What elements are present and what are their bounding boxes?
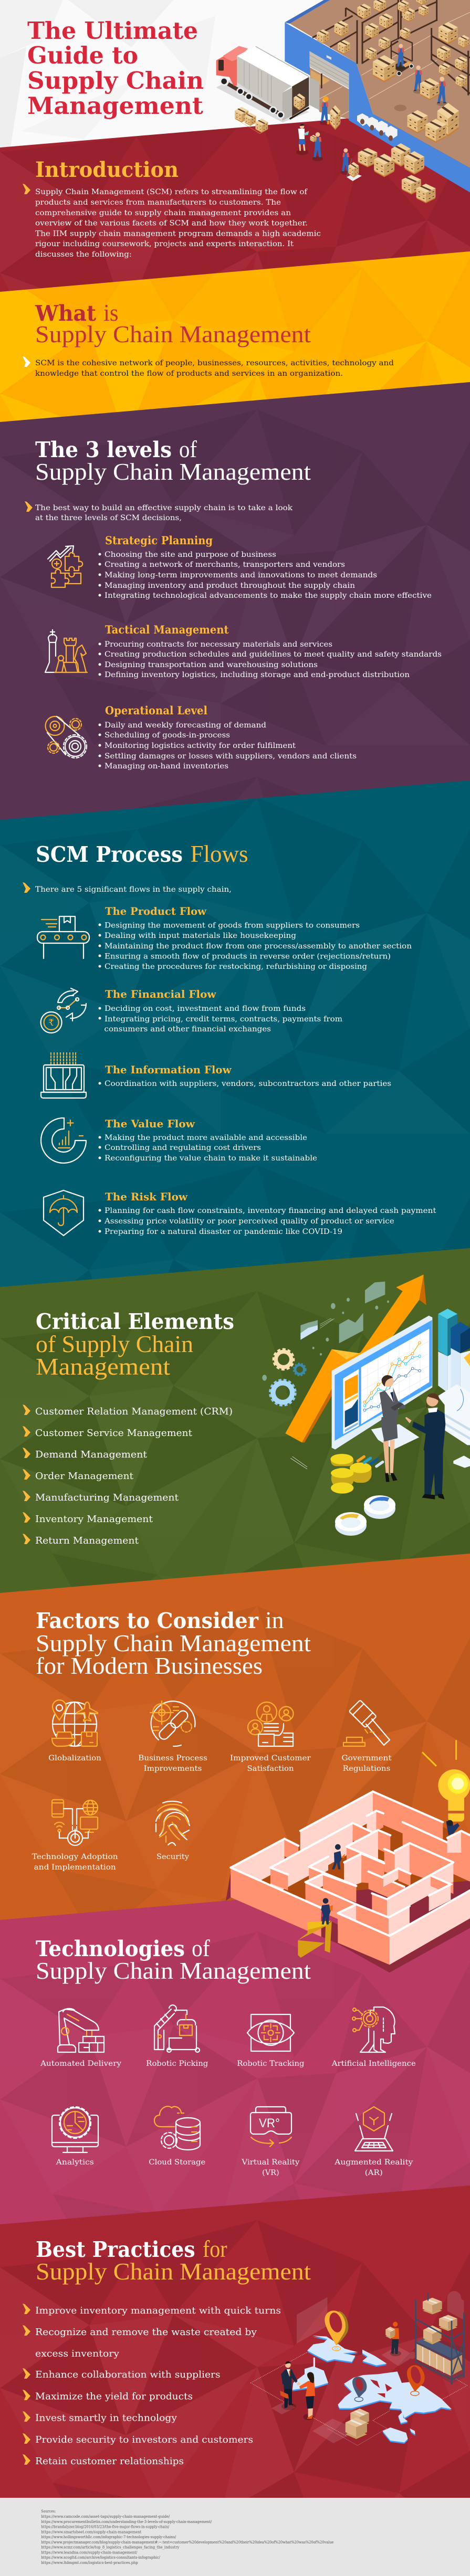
text block: sources: https://www.leandna.com/supply-chain-management/ [41,2550,138,2554]
text block: introduction: overview of the various facets of SCM and how they work together. [35,219,308,228]
list: operational level: Scheduling of goods-in-process [105,731,230,740]
text: flows intro: There are 5 significant flows in the supply chain, [35,885,232,894]
list: strategic planning [99,551,432,600]
woman [380,1375,406,1482]
icon: automated delivery [58,2009,104,2052]
heading: scm process flows: Flows [190,840,248,867]
icon: strategic planning [48,546,82,587]
text block: sources: https://www.camcode.com/asset-tags/supply-chain-management-guide/ [41,2514,170,2519]
panel: scm process flows [0,780,470,1287]
list: best practices: Invest smartly in technology [35,2412,177,2424]
text block: definition: SCM is the cohesive network of people, businesses, resources, activities, technology and [35,359,394,367]
label: government regulations: Government [341,1754,392,1762]
icon: financial flow: ₹ [48,1018,54,1028]
list: best practices [23,2304,281,2467]
list: value flow: Controlling and regulating cost drivers [105,1144,261,1152]
label: security: Security [156,1853,189,1861]
text block: sources: https://www.hollingsworthllc.com/infographic-7-technologies-supply-chains/ [41,2535,176,2539]
heading: best practices: for [203,2235,227,2262]
heading: critical elements: Critical Elements [36,1309,234,1334]
icon: risk flow shield [44,1190,83,1236]
list: critical elements: Order Management [35,1471,134,1482]
text block: introduction [35,188,321,259]
title: Management [27,92,203,120]
coins and chips [290,1448,385,1494]
heading: what is: What [35,301,96,326]
illustration: analytics dashboard with business people [262,1274,470,1536]
text block: levels intro: at the three levels of SCM decisions, [35,514,182,522]
list: value flow: Making the product more available and accessible [105,1134,307,1142]
icon: arrow bullet [25,501,33,512]
list: best practices: excess inventory [35,2348,120,2359]
list: product flow: Ensuring a smooth flow of products in reverse order (rejections/return) [105,952,391,960]
text block: sources: https://brandalyzer.blog/2016/03/23/the-five-major-flows-in-supply-chain/ [41,2525,170,2529]
text block: introduction: products and services from manufacturers to customers. The [35,198,281,207]
panel: best practices [0,2186,470,2498]
heading: critical elements: Management [36,1353,170,1380]
sub-heading: risk flow: The Risk Flow [105,1190,188,1203]
text block: introduction: rigour including coursework, projects and experts interaction. It [35,240,294,248]
icon: value flow [41,1118,86,1163]
label: technology adoption: and Implementation [34,1863,116,1872]
sub-heading: financial flow: The Financial Flow [105,988,216,1000]
panel: title header [0,0,470,157]
heading: technologies [36,1935,311,1984]
panel: introduction [0,0,470,441]
label: improved customer satisfaction: Improved Customer [230,1754,311,1762]
icon: augmented reality [355,2107,393,2151]
text block: sources [41,2509,334,2565]
label: technology adoption [32,1853,118,1872]
heading: technologies: of [192,1935,210,1961]
title: The Ultimate [27,17,198,45]
list: best practices: Recognize and remove the waste created by [35,2327,257,2338]
icon: business process improvements [150,1701,195,1746]
heading: factors to consider: for Modern Businesses [36,1652,263,1679]
heading: factors to consider: in [265,1607,284,1633]
label: business process improvements: Business Process [138,1754,207,1762]
list: product flow: Dealing with input materials like housekeeping [105,932,296,940]
panel: factors to consider [0,1548,470,1942]
list: risk flow: Preparing for a natural disaster or pandemic like COVID-19 [105,1228,342,1236]
sub-heading: tactical management: Tactical Management [105,623,229,636]
list: product flow: Designing the movement of goods from suppliers to consumers [105,922,360,930]
sub-heading: value flow: The Value Flow [105,1117,195,1130]
text block: sources: https://www.smartsheet.com/supply-chain-management [41,2529,141,2534]
text block: definition [35,359,394,378]
icon: technology adoption [52,1800,98,1845]
icon: artificial intelligence [352,2007,395,2052]
sub-heading: information flow: The Information Flow [105,1063,232,1076]
sub-heading: operational level: Operational Level [105,704,207,717]
list: strategic planning: Managing inventory and product throughout the supply chain [105,582,355,590]
list: best practices: Provide security to investors and customers [35,2434,253,2445]
list: risk flow: Assessing price volatility or poor perceived quality of product or service [104,1217,394,1226]
text block: sources: https://www.scogltd.com/archive/logistics-consultants-infographic/ [41,2555,160,2560]
heading: critical elements [36,1309,234,1380]
list: product flow [99,922,412,971]
heading: what is: Supply Chain Management [35,321,311,347]
icon: operational level [45,716,87,758]
list: critical elements: Customer Service Management [35,1428,193,1439]
icon: arrow bullet [23,184,30,194]
heading: technologies: Technologies [36,1936,185,1961]
sub-heading: product flow: The Product Flow [105,905,207,917]
label: augmented reality: (AR) [365,2169,383,2177]
list: product flow: Maintaining the product flow from one process/assembly to another section [105,942,412,951]
map pin: slate [352,2377,367,2398]
list: best practices: Enhance collaboration with suppliers [35,2369,221,2380]
icon: information flow [41,1053,86,1098]
list: operational level: Settling damages or losses with suppliers, vendors and clients [105,752,357,761]
heading: the 3 levels: of [179,436,197,462]
storage rack [416,2293,464,2384]
man [405,1393,445,1500]
label: cloud storage: Cloud Storage [149,2158,205,2167]
list: value flow [99,1134,317,1163]
list: critical elements: Customer Relation Management (CRM) [35,1406,233,1417]
icon: arrow bullet [23,356,30,367]
list: critical elements: Manufacturing Management [35,1492,179,1503]
icon: security fingerprint [156,1801,190,1845]
label: virtual reality [241,2158,300,2177]
icon: virtual reality: VR° [259,2116,280,2130]
icon: analytics [52,2107,98,2152]
list: best practices: Maximize the yield for products [35,2391,193,2402]
list: financial flow: Deciding on cost, investment and flow from funds [105,1005,306,1013]
text block: introduction: The IIM supply chain management program demands a high academic [35,230,321,238]
panel: what is supply chain management [0,251,470,422]
heading: the 3 levels: The 3 levels [35,437,172,462]
label: robotic tracking: Robotic Tracking [237,2060,305,2068]
icon: product flow conveyor [37,916,89,958]
heading: best practices: Supply Chain Management [36,2258,311,2285]
label: automated delivery: Automated Delivery [40,2060,121,2068]
label: government regulations [341,1754,392,1773]
heading: best practices [36,2235,311,2285]
list: risk flow [99,1207,436,1236]
heading: the 3 levels [35,436,311,485]
label: virtual reality: (VR) [262,2169,279,2177]
sub-heading: strategic planning: Strategic Planning [105,534,213,547]
business people handshake [280,2361,315,2420]
icon: cloud storage [154,2106,200,2150]
icon: robotic picking [154,2005,200,2052]
label: technology adoption: Technology Adoption [32,1853,118,1861]
label: robotic picking: Robotic Picking [146,2060,208,2068]
title [27,17,204,120]
list: operational level: Daily and weekly forecasting of demand [105,721,266,730]
list: financial flow: Integrating pricing, credit terms, contracts, payments from [105,1015,342,1023]
icon: robotic tracking [247,2014,294,2051]
label: analytics: Analytics [56,2158,94,2167]
label: globalization: Globalization [48,1754,101,1762]
list: tactical management: Procuring contracts for necessary materials and services [105,640,332,649]
list: financial flow [99,1005,342,1033]
map pin: orange [407,2365,425,2392]
list: tactical management: Designing transportation and warehousing solutions [105,661,318,669]
worker carrying box [385,2322,401,2356]
list: risk flow: Planning for cash flow constraints, inventory financing and delayed cash payment [105,1207,436,1215]
data rings [335,1495,395,1536]
panel: technologies [0,1741,470,2267]
heading: factors to consider: Supply Chain Management [36,1630,311,1656]
illustration: warehouse and truck [216,0,470,203]
list: strategic planning: Integrating technological advancements to make the supply chain more effective [105,592,432,600]
list: operational level [99,721,357,770]
heading: critical elements: of Supply Chain [36,1331,193,1357]
heading: what is [35,299,311,347]
illustration: maze with light bulb [226,1741,470,1972]
heading: technologies: Supply Chain Management [36,1957,311,1984]
list: tactical management [99,640,442,679]
panel: sources [0,2498,470,2576]
heading: best practices: Best Practices [36,2237,195,2262]
icon: financial flow [41,988,86,1033]
list: financial flow: consumers and other financial exchanges [104,1025,271,1033]
panel: critical elements [0,1244,470,1627]
list: value flow: Reconfiguring the value chain to make it sustainable [105,1154,317,1163]
heading: factors to consider [36,1607,311,1679]
icon: improved customer satisfaction [248,1702,293,1746]
text block: levels intro [35,504,293,522]
heading: the 3 levels: Supply Chain Management [35,458,311,485]
list: strategic planning: Creating a network of merchants, transporters and vendors [105,561,345,569]
text block: definition: knowledge that control the flow of products and services in an organization. [35,369,343,378]
text block: sources: Sources: [41,2509,56,2514]
heading: scm process flows [36,840,248,867]
list: critical elements: Inventory Management [35,1514,153,1525]
text block: sources: https://www.procurementbulletin.com/understanding-the-3-levels-of-supply-chain-management/ [41,2519,212,2524]
list: product flow: Creating the procedures for restocking, refurbishing or disposing [105,963,367,971]
icon: arrow bullet [23,882,30,893]
list: strategic planning: Choosing the site and purpose of business [105,551,276,559]
icon: virtual reality [250,2107,291,2147]
text block: sources: https://www.ltdmgmt.com/logistics-best-practices.php [41,2560,138,2565]
text block: sources: https://www.projectmanager.com/blog/supply-chain-management#:~:text=customer%20development%20and%20their%20idea%20of%20what%20was%20of%20value [41,2540,334,2545]
label: business process improvements: Improvements [144,1765,202,1773]
list: best practices: Retain customer relationships [35,2456,184,2467]
list: critical elements [23,1405,233,1546]
text block: sources: https://www.scmr.com/article/top_8_logistics_challenges_facing_the_industry [41,2545,180,2550]
map pin: yellow [325,2310,348,2345]
label: artificial intelligence: Artificial Intelligence [331,2060,416,2068]
heading: what is: is [103,299,119,326]
heading: scm process flows: SCM Process [36,842,183,867]
text block: introduction: Supply Chain Management (SCM) refers to streamlining the flow of [35,188,308,196]
list: operational level: Monitoring logistics activity for order fulfilment [105,742,296,750]
text block: levels intro: The best way to build an effective supply chain is to take a look [35,504,293,512]
label: business process improvements [138,1754,207,1773]
title: Supply Chain [27,67,204,94]
list: strategic planning: Making long-term improvements and innovations to meet demands [105,571,377,579]
text block: introduction: comprehensive guide to supply chain management provides an [35,209,291,217]
label: government regulations: Regulations [343,1765,390,1773]
label: improved customer satisfaction: Satisfaction [247,1765,294,1773]
title: Guide to [27,41,138,69]
label: improved customer satisfaction [230,1754,311,1773]
icon: globalization [52,1700,98,1746]
list: information flow: Coordination with suppliers, vendors, subcontractors and other parties [105,1080,391,1088]
label: augmented reality: Augmented Reality [334,2158,413,2167]
list: tactical management: Creating production schedules and guidelines to meet quality and safety standards [105,650,442,659]
heading: factors to consider: Factors to Consider [36,1608,259,1633]
icon: tactical management [45,630,87,672]
panel: the 3 levels [0,382,470,820]
label: augmented reality [334,2158,413,2177]
list: critical elements: Return Management [35,1535,139,1546]
list: operational level: Managing on-hand inventories [105,762,228,770]
list: critical elements: Demand Management [35,1449,148,1460]
icon: government regulations gavel [343,1700,390,1746]
illustration: global logistics map [250,2291,467,2445]
heading: Introduction: Introduction [35,157,179,182]
label: virtual reality: Virtual Reality [241,2158,300,2167]
list: tactical management: Defining inventory logistics, including storage and end-product distribution [105,671,410,679]
text block: introduction: discusses the following: [35,250,132,259]
list: best practices: Improve inventory management with quick turns [35,2305,281,2316]
